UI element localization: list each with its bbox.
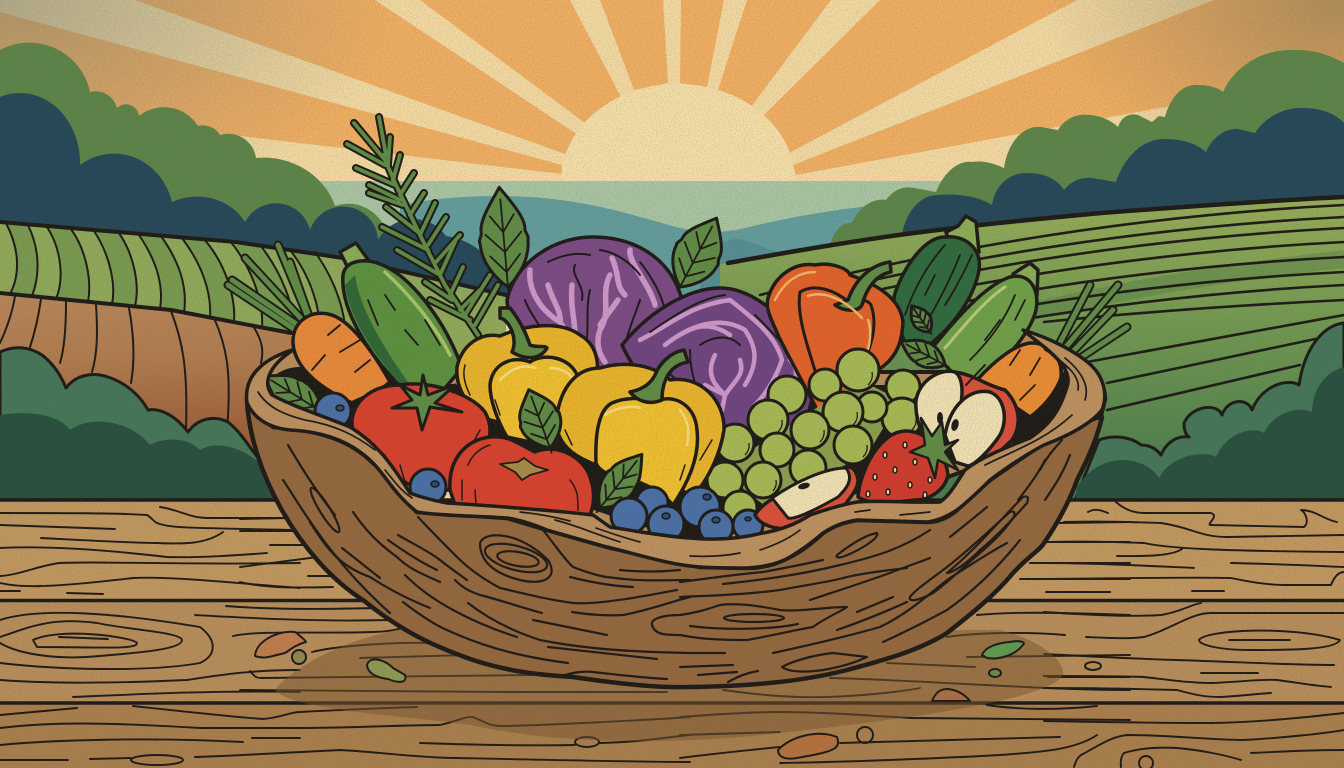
sky background	[0, 0, 1344, 200]
basil leaf: on bowl rim	[256, 362, 335, 429]
field: left green striped	[0, 222, 506, 370]
tomato left	[352, 375, 490, 490]
zucchini left	[340, 243, 462, 391]
bowl shadow	[275, 630, 1063, 741]
rosemary sprig	[347, 117, 498, 335]
basil leaf: right of cabbage	[657, 207, 737, 303]
blueberries	[315, 393, 763, 544]
yellow bell pepper left	[457, 308, 598, 447]
field: left ploughed brown	[0, 293, 300, 450]
apple halves	[755, 365, 1018, 528]
field: right striped	[720, 197, 1344, 500]
tree line: right	[831, 50, 1344, 260]
small basil leaves: right of pepper	[895, 300, 954, 378]
light zucchini	[933, 263, 1038, 385]
sun rays	[0, 0, 1344, 175]
bushes: lower right	[1075, 323, 1344, 500]
bushes: lower left	[0, 348, 290, 500]
basil leaf: lower centre	[584, 444, 655, 523]
tomato front	[450, 437, 594, 515]
bowl lip	[247, 330, 1105, 568]
carrot right with greens	[977, 285, 1127, 417]
dark zucchini	[894, 216, 979, 345]
red cabbage: front	[622, 288, 814, 437]
crumbs and debris on table	[255, 632, 1101, 759]
yellow bell pepper right	[556, 350, 724, 505]
tree line: left	[0, 43, 508, 320]
sky corner shading	[0, 0, 1344, 220]
bowl: back rim and interior	[247, 330, 1105, 570]
sea and distant hills	[300, 181, 960, 300]
bowl body	[247, 400, 1102, 687]
sun	[561, 84, 795, 278]
carrot left with greens	[228, 245, 390, 403]
grape bunch	[707, 349, 922, 525]
orange bell pepper	[767, 262, 903, 425]
basil leaf: top	[475, 185, 533, 297]
table planks	[0, 500, 1344, 768]
red cabbage: back	[507, 237, 683, 373]
basil leaf: on pepper	[509, 383, 571, 460]
strawberry	[858, 418, 958, 503]
